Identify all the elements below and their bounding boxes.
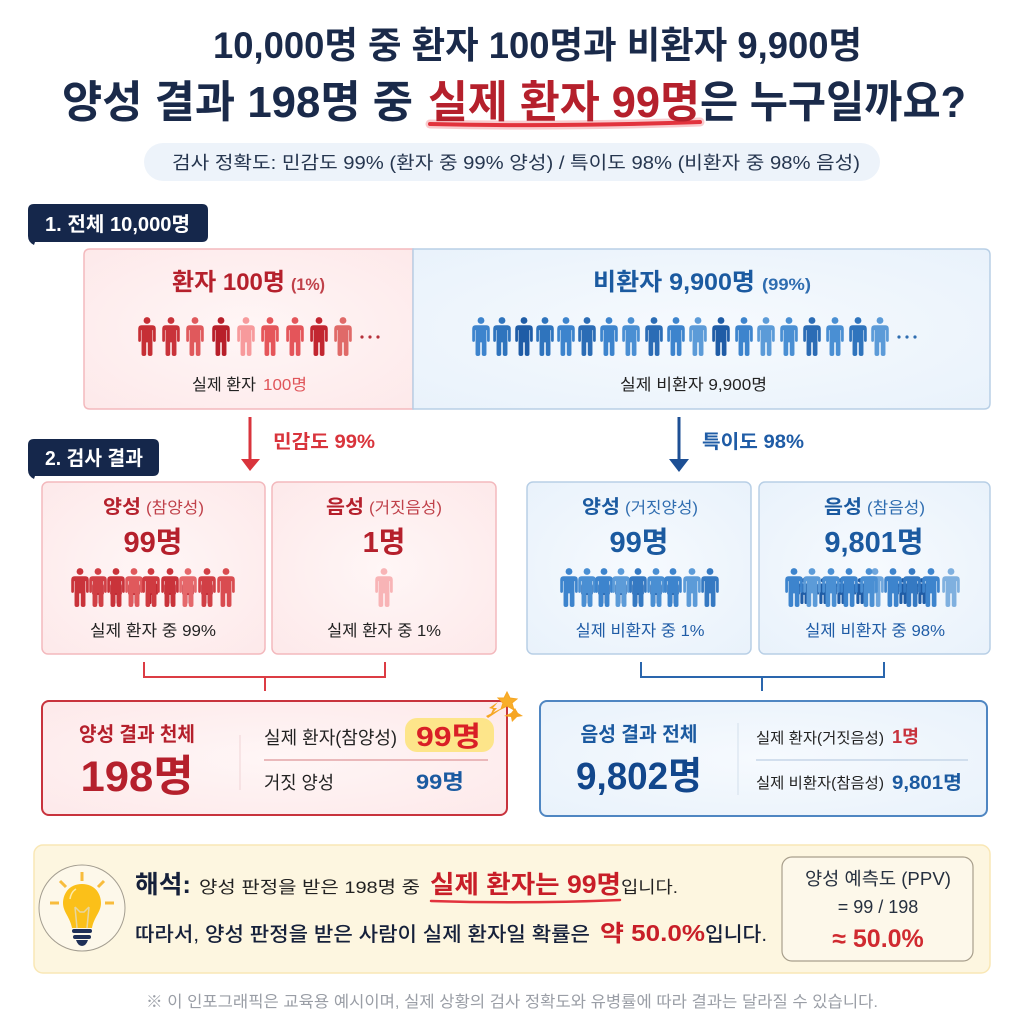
panel: positive total: 거짓 양성 (264, 773, 334, 793)
bracket: blue (641, 662, 884, 691)
panel: interpretation: 해석: (135, 871, 191, 899)
panel: negative total: 실제 비환자(참음성) (756, 775, 884, 792)
bracket: red (144, 662, 385, 691)
panel: false negative: 1명 (363, 526, 405, 559)
panel: false negative: (거짓음성) (369, 499, 442, 517)
panel: non-patients 9900: 실제 비환자 9,900명 (620, 376, 767, 394)
icon row: non-patients (472, 317, 917, 356)
section label 1: 1. 전체 10,000명 (45, 213, 190, 236)
panel: false positive: 99명 (610, 526, 668, 559)
callout: PPV: 양성 예측도 (PPV) (805, 869, 951, 889)
subtitle pill: 검사 정확도: 민감도 99% (환자 중 99% 양성) / 특이도 98% (비환자 중 98% 음성) (172, 153, 860, 173)
panel: false positive (527, 482, 751, 654)
panel: true positive: (참양성) (146, 499, 204, 517)
icon row: patients (138, 317, 380, 356)
panel: patients 100: 환자 100명 (172, 269, 285, 296)
panel: interpretation: 약 50.0% (600, 920, 705, 946)
icon: sparkles (486, 692, 523, 722)
panel: interpretation: 양성 판정을 받은 198명 중 (199, 878, 420, 897)
callout: PPV: = 99 / 198 (838, 897, 918, 917)
panel: interpretation: 실제 환자는 99명 (430, 871, 621, 899)
panel: interpretation (34, 845, 990, 973)
panel: positive total: 실제 환자(참양성) (264, 728, 397, 748)
title (62, 25, 966, 127)
panel: patients 100: (1%) (291, 275, 325, 294)
panel: true negative (759, 482, 990, 654)
title: 10,000명 중 환자 100명과 비환자 9,900명 (213, 25, 862, 66)
panel: positive total: 198명 (80, 753, 194, 801)
highlight: 99 true positives (405, 718, 494, 752)
panel: patients 100 (84, 249, 413, 409)
panel: non-patients 9900: 비환자 9,900명 (593, 269, 755, 296)
panel: true positive: 99명 (124, 526, 182, 559)
icon: single person (375, 568, 393, 607)
icon: light bulb (39, 865, 125, 951)
panel: negative total: 실제 환자(거짓음성) (756, 730, 884, 747)
panel: false negative: 음성 (326, 496, 364, 518)
panel: true negative: 음성 (824, 496, 862, 518)
panel: negative total: 음성 결과 전체 (580, 723, 698, 746)
panel: negative total: 9,802명 (576, 756, 702, 798)
panel: false positive: 실제 비환자 중 1% (576, 622, 704, 640)
callout: PPV (782, 857, 973, 961)
section label 2 (28, 439, 159, 479)
subtitle pill (144, 143, 880, 181)
panel: interpretation: 따라서, 양성 판정을 받은 사람이 실제 환자일 확률은 (135, 923, 590, 946)
panel: false positive: (거짓양성) (625, 499, 698, 517)
icon row: true negatives (785, 568, 960, 607)
panel: true negative: 9,801명 (824, 526, 924, 559)
panel: positive total: 99명 (416, 771, 464, 794)
arrow: specificity: 특이도 98% (702, 431, 804, 453)
callout: PPV: ≈ 50.0% (832, 925, 924, 953)
highlight: 99 true positives: 99명 (416, 721, 481, 752)
panel: negative total (540, 701, 987, 816)
panel: interpretation: 입니다. (705, 923, 767, 946)
panel: true negative: (참음성) (867, 499, 925, 517)
section label 2: 2. 검사 결과 (45, 447, 143, 470)
footnote: ※ 이 인포그래픽은 교육용 예시이며, 실제 상황의 검사 정확도와 유병률에 따라 결과는 달라질 수 있습니다. (146, 993, 878, 1011)
arrow: sensitivity: 민감도 99% (273, 431, 375, 453)
panel: patients 100: 100명 (263, 376, 307, 394)
panel: interpretation: 입니다. (621, 878, 678, 897)
section label 1 (28, 204, 208, 245)
panel: non-patients 9900 (413, 249, 990, 409)
panel: negative total: 9,801명 (892, 772, 962, 794)
panel: positive total (42, 692, 523, 815)
panel: non-patients 9900: (99%) (762, 275, 811, 294)
panel: negative total: 1명 (892, 727, 919, 747)
panel: false positive: 양성 (582, 496, 620, 518)
panel: patients 100: 실제 환자 (192, 376, 256, 394)
panel: false negative (272, 482, 496, 654)
panel: true positive: 양성 (103, 496, 141, 518)
title: 실제 환자 99명 (428, 78, 700, 127)
arrow: specificity (669, 417, 804, 472)
arrow: sensitivity (241, 417, 375, 471)
panel: true positive (42, 482, 265, 654)
panel: true positive: 실제 환자 중 99% (90, 622, 216, 640)
panel: false negative: 실제 환자 중 1% (327, 622, 441, 640)
title: 양성 결과 198명 중 (62, 78, 413, 127)
panel: positive total: 양성 결과 천체 (79, 723, 195, 746)
icon row: false positives (560, 568, 719, 607)
panel: true negative: 실제 비환자 중 98% (805, 622, 945, 640)
title: 은 누구일까요? (700, 78, 966, 127)
icon row: true positives (71, 568, 235, 607)
